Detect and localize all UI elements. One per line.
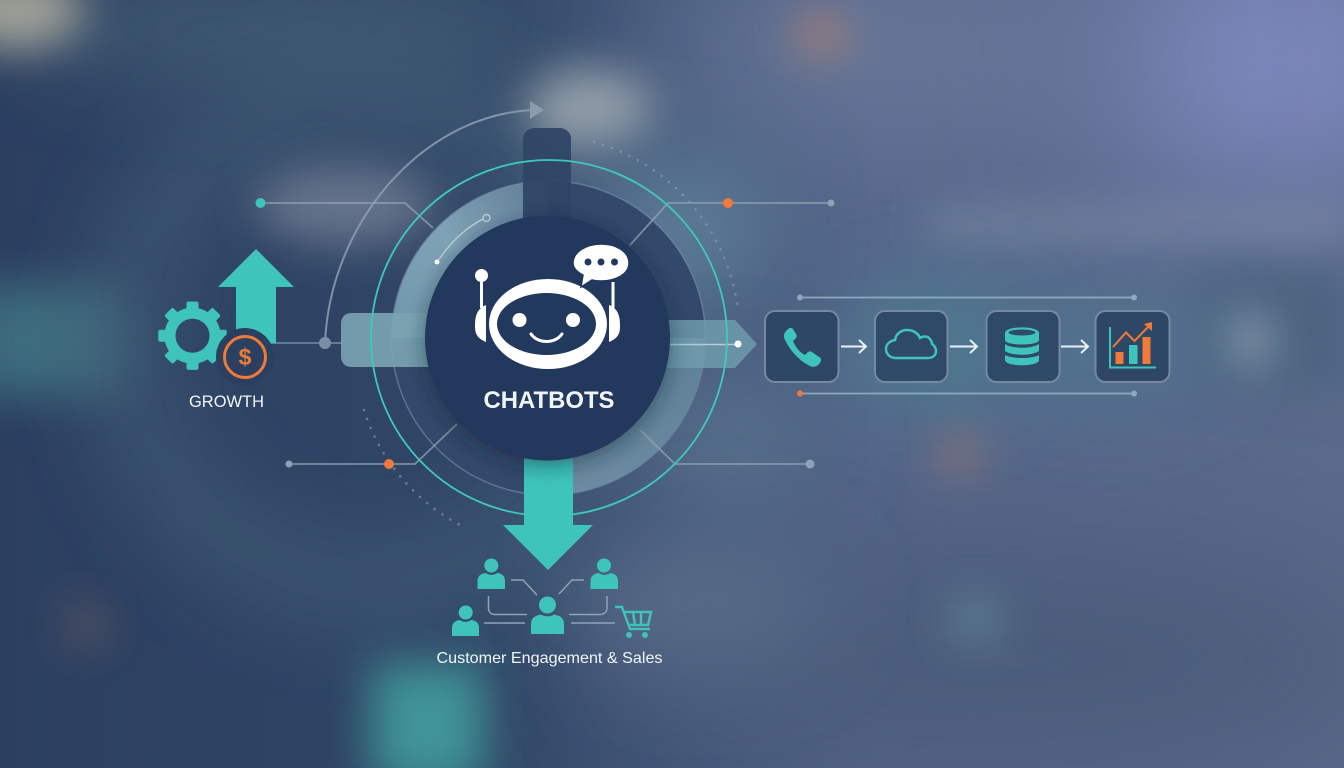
icon: customer network <box>452 558 651 638</box>
icon: growth arrow <box>218 249 294 343</box>
central circle <box>425 216 670 460</box>
right arrow bar <box>660 320 757 368</box>
process rail top <box>797 294 1137 300</box>
teal down arrow <box>503 440 593 570</box>
icon: speech bubble <box>573 244 629 287</box>
process step: phone <box>765 311 838 382</box>
person centre <box>531 596 564 634</box>
connector nodes <box>256 198 834 469</box>
outer band ring <box>392 181 706 495</box>
dotted orbit arcs <box>364 142 738 526</box>
curved growth arrow <box>325 101 544 343</box>
process arrow 2 <box>950 340 977 353</box>
label: customer engagement and sales: Customer Engagement & Sales <box>436 650 662 667</box>
icon: shopping cart <box>615 607 651 638</box>
person left <box>452 606 479 636</box>
icon: robot head <box>475 269 620 370</box>
icon: dollar coin <box>216 328 274 386</box>
person top left <box>478 558 505 589</box>
process step: analytics chart <box>1096 311 1170 382</box>
icon: dollar coin: $ <box>239 344 252 370</box>
label: growth: GROWTH <box>189 392 264 411</box>
top bar <box>523 128 571 238</box>
network lines <box>484 580 615 623</box>
left bar <box>341 313 446 367</box>
process rail bottom <box>797 390 1137 396</box>
icon: gear <box>158 302 227 370</box>
person top right <box>590 558 618 589</box>
process step: database <box>986 311 1060 382</box>
title: chatbots: CHATBOTS <box>484 387 614 414</box>
process arrow 1 <box>841 340 866 353</box>
process step: cloud <box>875 311 948 382</box>
circuit connector lines <box>262 203 830 464</box>
process arrow 3 <box>1061 340 1088 353</box>
teal ring <box>371 160 727 516</box>
small inner arc <box>434 214 490 264</box>
